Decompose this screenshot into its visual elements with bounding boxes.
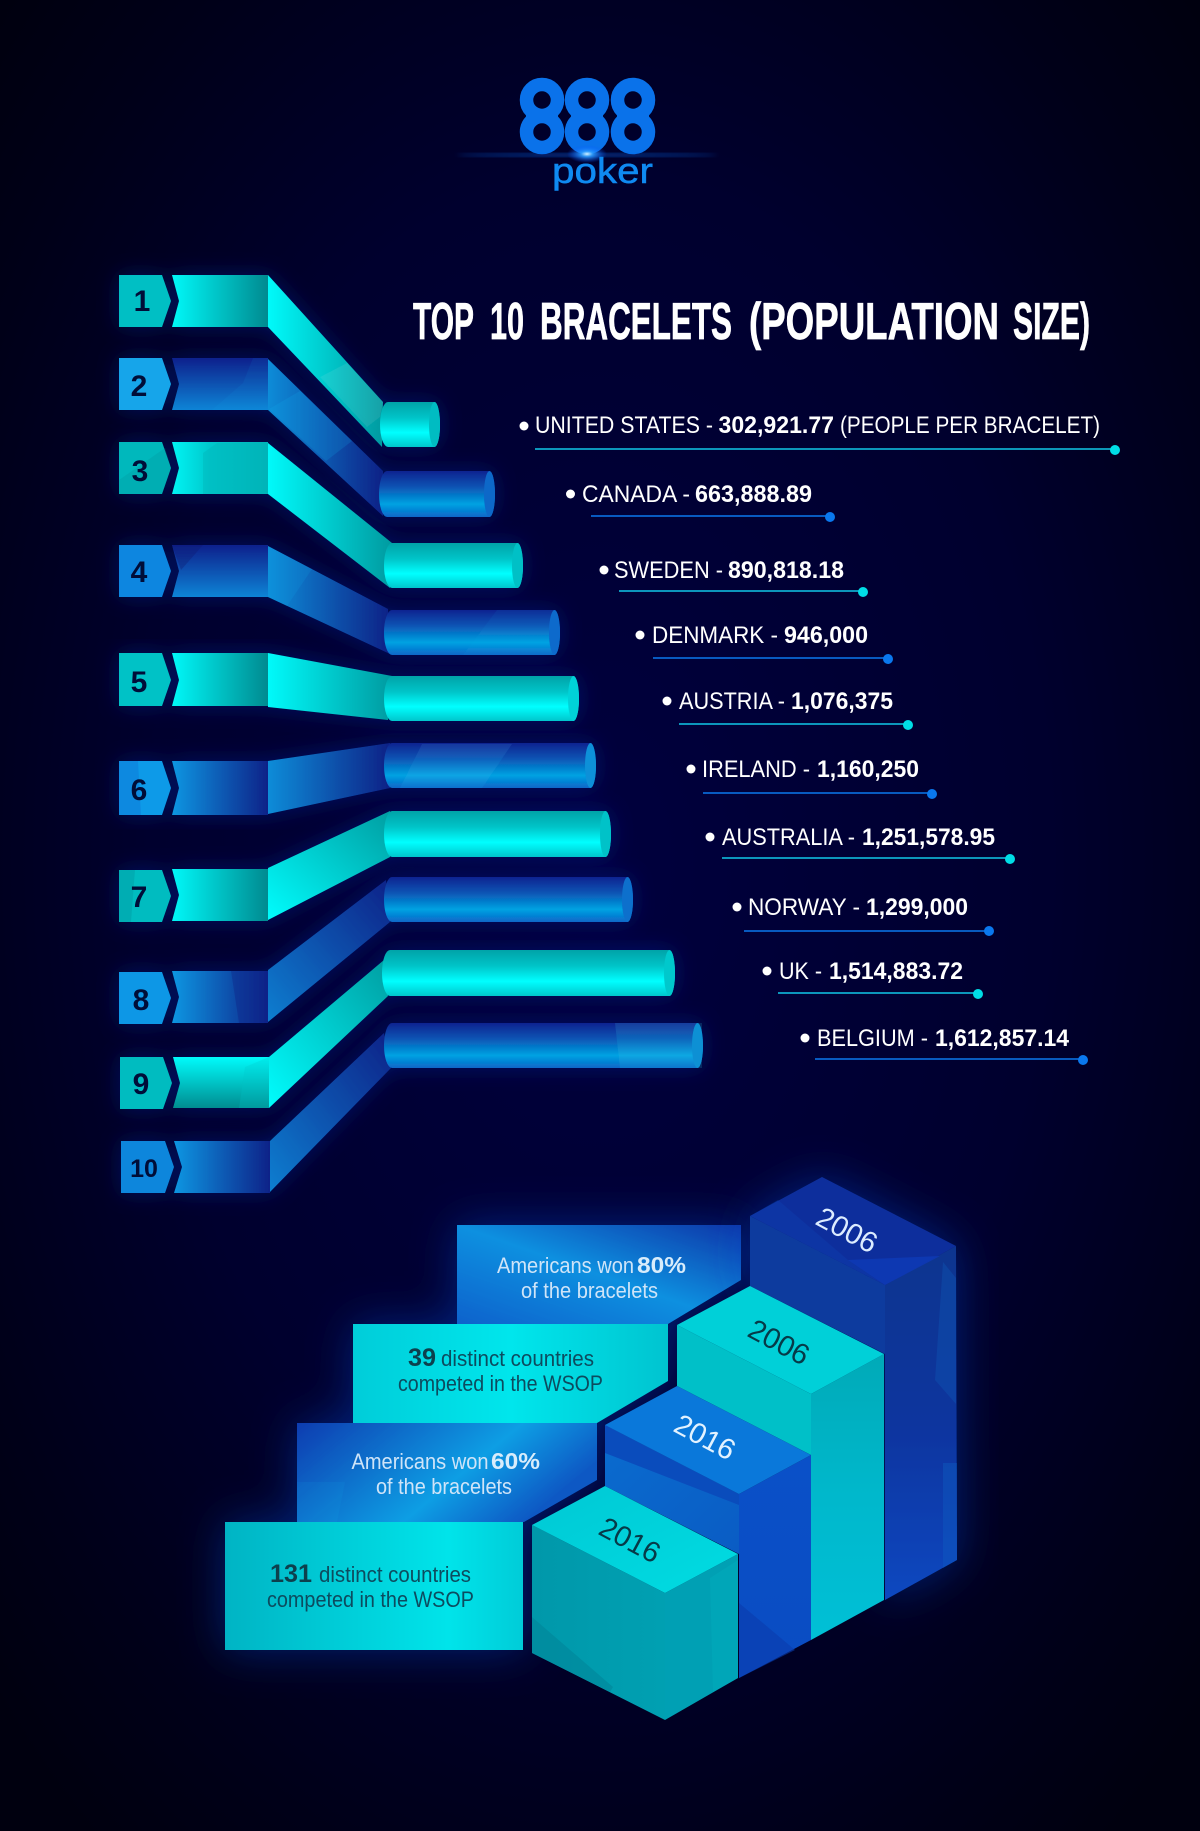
- title: BRACELETS: [540, 293, 732, 351]
- block: 2016 cyan: 2016: [594, 1512, 666, 1570]
- label: Norway: [732, 894, 994, 936]
- panel: 39 distinct countries: [353, 1324, 668, 1423]
- chart: top 10 bracelets bars: [119, 275, 703, 1193]
- comparison stat panels: [225, 1225, 741, 1650]
- panel: Americans won 60%: [297, 1423, 597, 1522]
- title: (POPULATION: [749, 293, 999, 351]
- label: UK: UK -: [779, 958, 822, 985]
- block: 2016 blue: 2016: [669, 1409, 741, 1467]
- label: Ireland: IRELAND -: [702, 756, 810, 783]
- label: Australia: 1,251,578.95: [862, 824, 995, 851]
- row 9: [120, 950, 675, 1109]
- label: Denmark: [636, 622, 893, 664]
- label: UK: [762, 958, 983, 999]
- rank badge 3: [119, 442, 171, 494]
- label: Norway: 1,299,000: [866, 894, 968, 921]
- row 8: [119, 877, 633, 1024]
- title: TOP: [413, 293, 474, 351]
- label: Canada: [566, 481, 835, 522]
- label: Ireland: 1,160,250: [817, 756, 919, 783]
- label: Ireland: [686, 756, 937, 799]
- label: United States: 302,921.77: [718, 412, 834, 439]
- row 10: 10: [130, 1155, 158, 1183]
- row 9: 9: [133, 1068, 149, 1101]
- label: UK: 1,514,883.72: [829, 958, 963, 985]
- panel: 131 distinct countries: distinct countries: [319, 1562, 471, 1587]
- row 2: 2: [131, 370, 147, 403]
- label: Sweden: 890,818.18: [728, 557, 844, 584]
- label: United States: (PEOPLE PER BRACELET): [840, 412, 1100, 439]
- panel: Americans won 60%: 60%: [491, 1448, 540, 1474]
- label: Australia: AUSTRALIA -: [722, 824, 855, 851]
- label: Austria: 1,076,375: [791, 688, 893, 715]
- label: Denmark: DENMARK -: [652, 622, 778, 649]
- block: 2016 blue: [605, 1386, 811, 1678]
- row 2: [119, 358, 495, 517]
- row 7: [119, 811, 611, 922]
- row 5: [119, 653, 579, 721]
- row 6: 6: [131, 774, 147, 807]
- country labels: [520, 412, 1120, 1065]
- row 5: 5: [131, 666, 147, 699]
- row 1: [119, 275, 440, 447]
- label: Belgium: 1,612,857.14: [935, 1025, 1070, 1052]
- rank badge 7: [119, 870, 171, 922]
- isometric year blocks: [532, 1177, 957, 1720]
- block: 2006 cyan: 2006: [743, 1314, 815, 1372]
- block: 2006 blue: 2006: [811, 1202, 883, 1260]
- label: Australia: [706, 824, 1015, 864]
- rank badge 2: [119, 358, 171, 410]
- label: Belgium: BELGIUM -: [817, 1025, 928, 1052]
- label: Canada: 663,888.89: [695, 481, 812, 508]
- panel: 131 distinct countries: 131: [270, 1560, 312, 1588]
- panel: 131 distinct countries: [225, 1522, 523, 1650]
- row 6: [119, 743, 596, 815]
- title: 10: [490, 293, 524, 351]
- label: Austria: AUSTRIA -: [679, 688, 785, 715]
- title: SIZE): [1013, 293, 1090, 351]
- title: [413, 293, 1090, 351]
- panel: 131 distinct countries: competed in the WSOP: [267, 1587, 474, 1612]
- row 3: [119, 442, 523, 588]
- label: Norway: NORWAY -: [748, 894, 860, 921]
- label: Denmark: 946,000: [784, 622, 868, 649]
- block: 2006 cyan: [677, 1286, 884, 1640]
- label: Belgium: [800, 1025, 1088, 1065]
- panel: Americans won 80%: [457, 1225, 741, 1324]
- panel: 39 distinct countries: distinct countries: [441, 1346, 594, 1371]
- panel: Americans won 80%: of the bracelets: [521, 1278, 658, 1303]
- rank badge 6: [119, 761, 171, 815]
- row 4: [119, 545, 560, 655]
- panel: Americans won 80%: 80%: [637, 1252, 686, 1278]
- logo flare: [457, 145, 717, 163]
- label: Sweden: [600, 557, 868, 597]
- panel: Americans won 60%: Americans won: [352, 1449, 488, 1474]
- rank badge 8: [119, 972, 171, 1024]
- row 7: 7: [131, 881, 147, 914]
- row 4: 4: [131, 556, 148, 589]
- panel: Americans won 60%: of the bracelets: [376, 1474, 512, 1499]
- block: 2006 blue: [750, 1177, 957, 1600]
- panel: 39 distinct countries: 39: [408, 1344, 436, 1372]
- rank badge 10: [121, 1141, 174, 1193]
- label: United States: [520, 412, 1120, 455]
- block: 2016 cyan: [532, 1486, 738, 1720]
- logo: 888 poker: [457, 84, 717, 191]
- logo word: poker: [552, 150, 653, 191]
- rank badge 9: [120, 1057, 172, 1109]
- row 10: [121, 1023, 703, 1193]
- rank badge 5: [119, 653, 171, 706]
- row 8: 8: [133, 984, 149, 1017]
- rank badge 4: [119, 545, 171, 597]
- row 1: 1: [134, 285, 150, 318]
- label: Austria: [662, 688, 913, 730]
- panel: 39 distinct countries: competed in the WSOP: [398, 1371, 603, 1396]
- row 3: 3: [132, 455, 148, 488]
- icon: 888 rings: [526, 84, 649, 148]
- panel: Americans won 80%: Americans won: [497, 1253, 634, 1278]
- rank badge 1: [119, 275, 171, 327]
- label: United States: UNITED STATES -: [535, 412, 713, 439]
- label: Canada: CANADA -: [582, 481, 690, 508]
- label: Sweden: SWEDEN -: [614, 557, 723, 584]
